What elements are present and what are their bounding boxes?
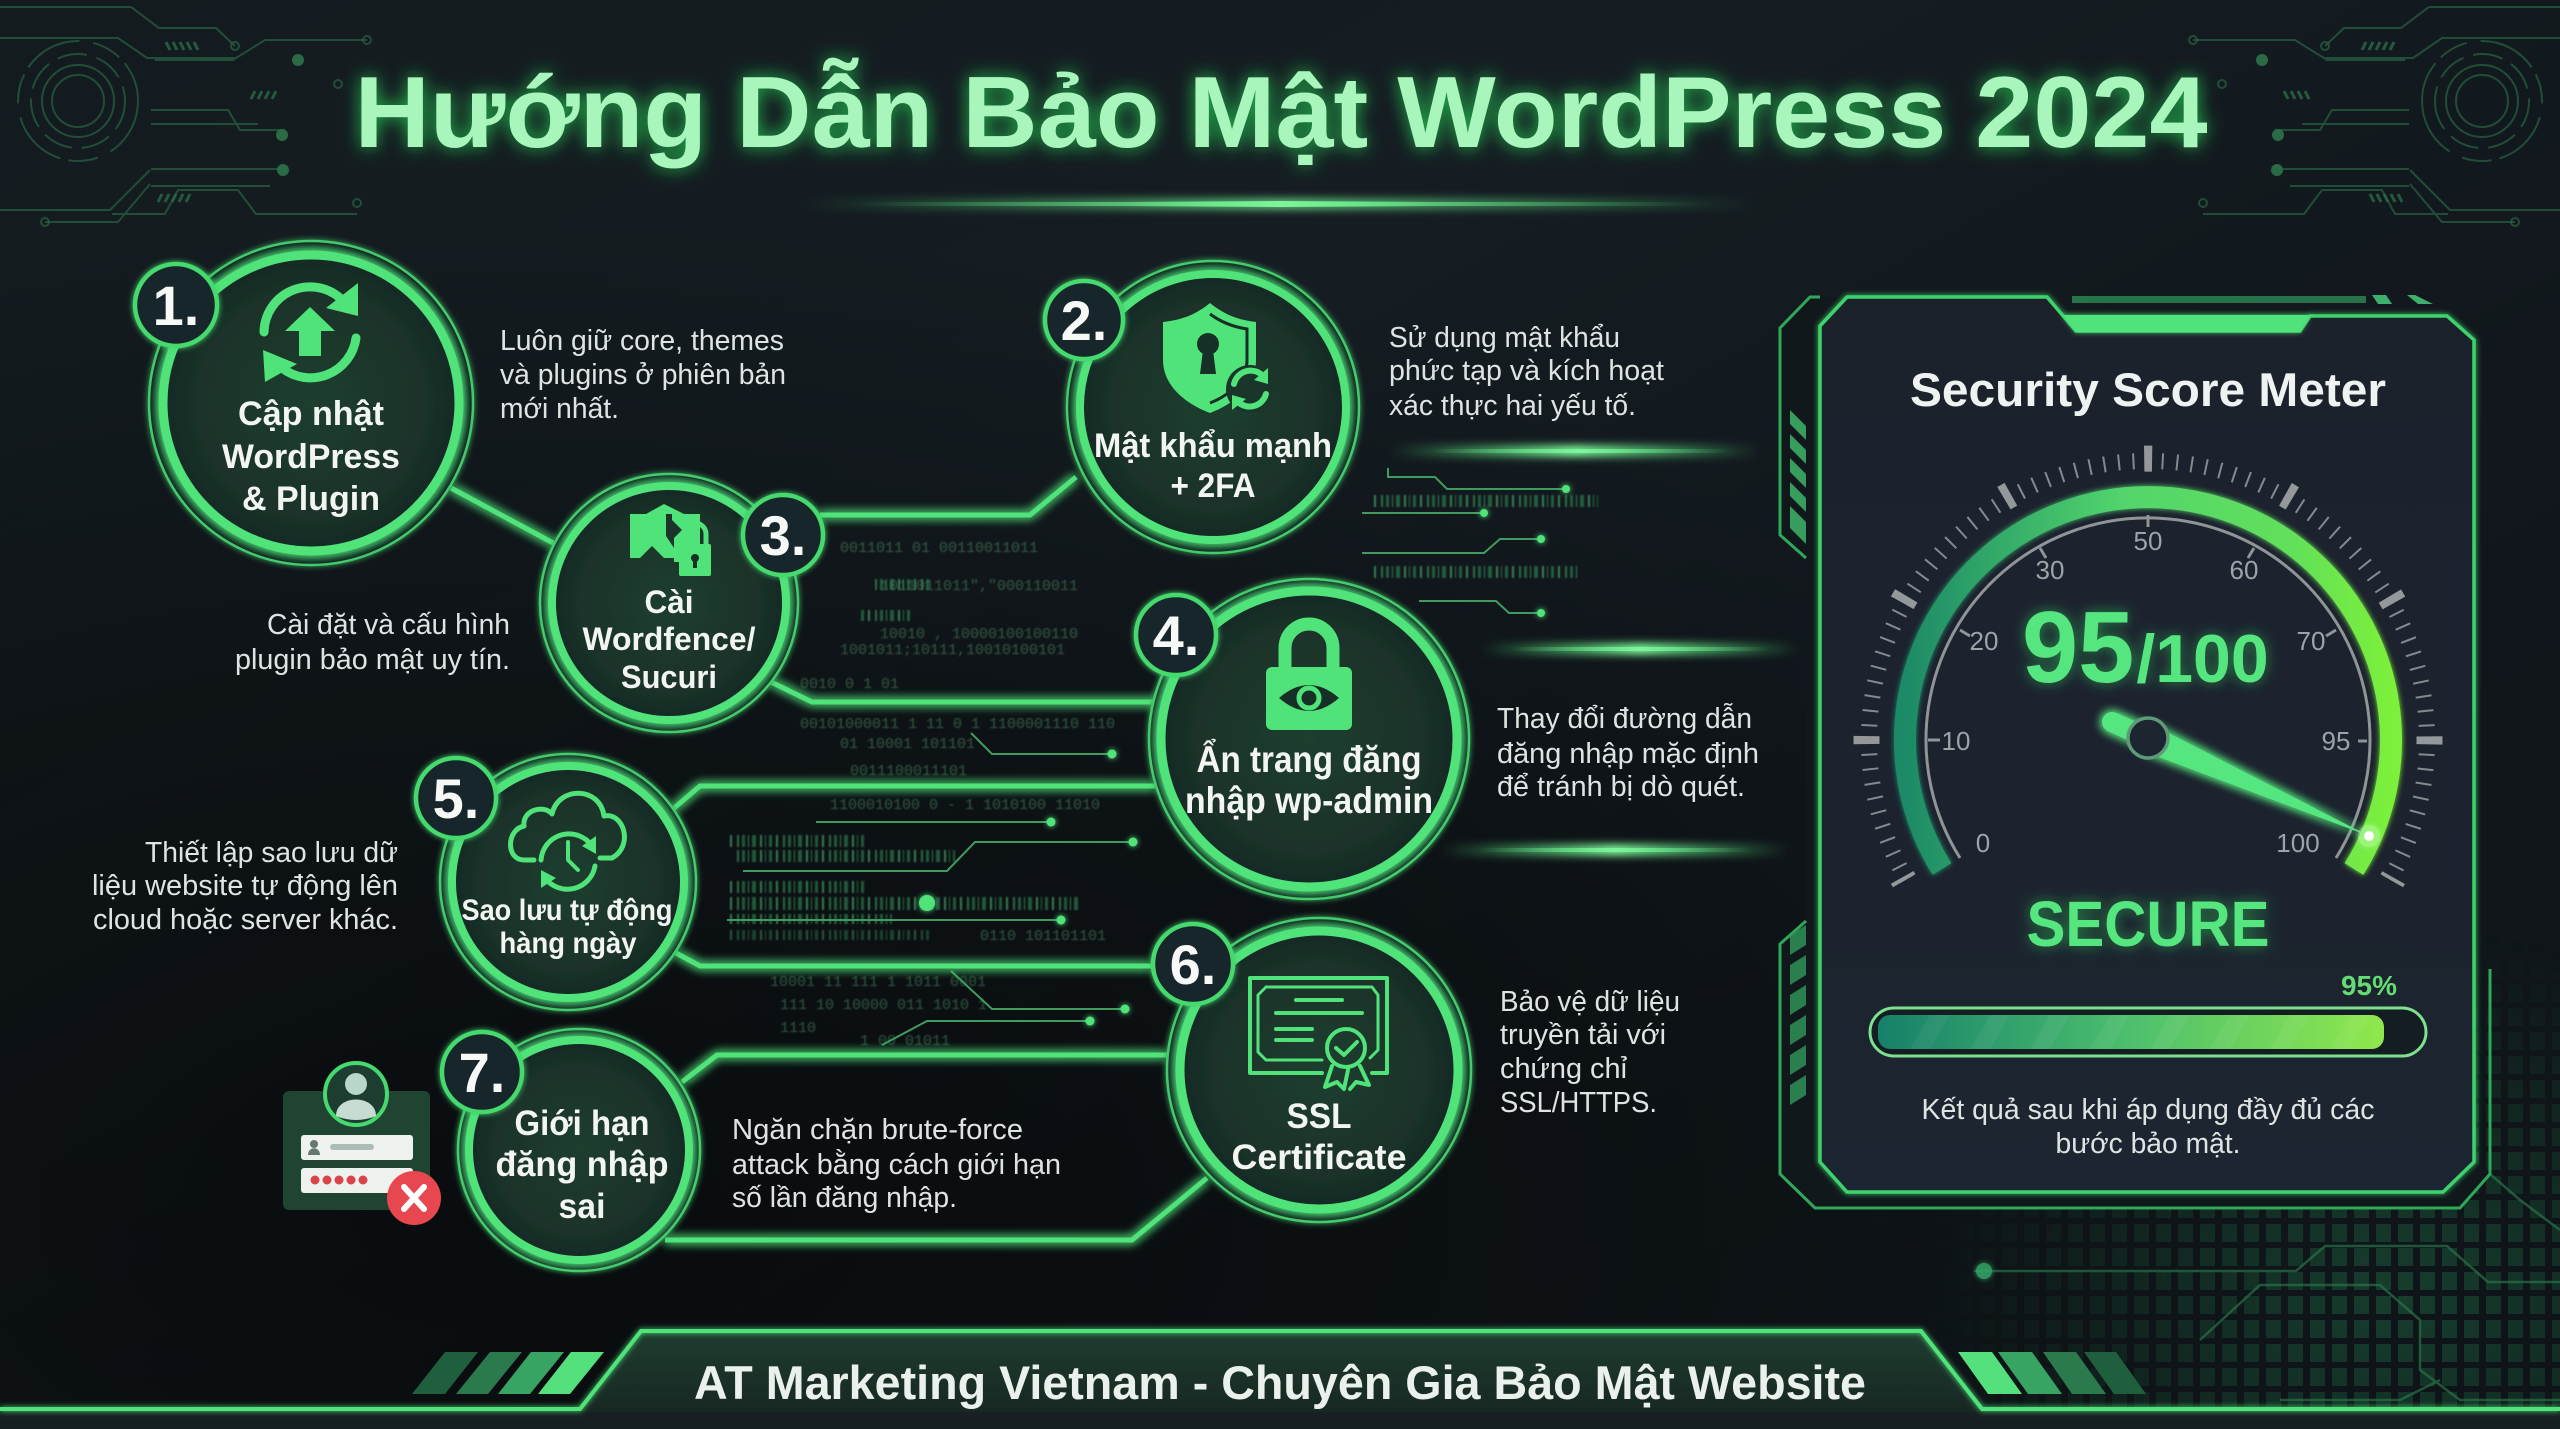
step 3 description: plugin bảo mật uy tín. (235, 644, 510, 676)
status text: SECURE (2026, 888, 2270, 960)
step 5 badge (416, 758, 496, 838)
step 3 description (235, 609, 510, 676)
icon: certificate (1250, 978, 1387, 1089)
step 1 label (222, 395, 400, 518)
step 7 label: sai (558, 1187, 606, 1226)
data code streams: 01 10001 101101 (840, 736, 975, 753)
step 6 description: truyền tải với (1500, 1019, 1666, 1051)
progress bar (1870, 1008, 2426, 1056)
step 7 badge: 7. (459, 1041, 505, 1104)
panel caption (1922, 1094, 2374, 1160)
step 1 badge: 1. (153, 274, 199, 337)
step 4 badge: 4. (1153, 604, 1199, 667)
step 6 label: Certificate (1232, 1138, 1406, 1177)
footer text: AT Marketing Vietnam - Chuyên Gia Bảo Mật Website (694, 1356, 1866, 1409)
step 1 description (500, 325, 786, 425)
icon: sync arrow up (263, 283, 358, 382)
gauge numeric labels: 0 (1976, 828, 1990, 858)
step 2 badge (1045, 281, 1123, 359)
icon: lock with eye (1266, 624, 1352, 730)
step 2 label: + 2FA (1170, 467, 1256, 505)
panel caption: Kết quả sau khi áp dụng đầy đủ các (1922, 1094, 2374, 1126)
step 2 badge: 2. (1061, 289, 1107, 352)
step 2 label: Mật khẩu mạnh (1094, 427, 1332, 465)
step 3 label: Sucuri (621, 659, 717, 695)
step 6 label: SSL (1286, 1097, 1352, 1136)
step 7 ring (458, 1029, 700, 1271)
step 3 badge (743, 495, 823, 575)
gauge numeric labels: 60 (2230, 555, 2258, 585)
footer banner (0, 1330, 2560, 1429)
step 2 description (1389, 322, 1664, 422)
data code streams: 10001 11 111 1 1011 0001 (770, 974, 986, 991)
step 5 description: liệu website tự động lên (92, 870, 398, 902)
step 4 ring (1149, 579, 1469, 899)
percent label: 95% (2341, 970, 2397, 1001)
step 5 label: Sao lưu tự động (462, 894, 672, 927)
step 7 description: Ngăn chặn brute-force (732, 1114, 1023, 1146)
step 7 description: số lần đăng nhập. (732, 1182, 957, 1214)
gauge numeric labels: 30 (2036, 555, 2064, 585)
step 1 description: Luôn giữ core, themes (500, 325, 784, 357)
step 2: password (1045, 261, 1359, 553)
step 6: ssl (1153, 918, 1471, 1222)
step 2 description: Sử dụng mật khẩu (1389, 322, 1620, 354)
step 5 description: cloud hoặc server khác. (93, 904, 398, 936)
data code streams: 0011100011101 (850, 763, 967, 780)
gauge inner scale (1926, 515, 2370, 858)
step 5 label (462, 894, 672, 960)
data code streams: 1001011;10111,10010100101 (840, 642, 1065, 659)
icon: firewall lock (630, 504, 711, 576)
data code streams: 1 00 01011 (860, 1033, 950, 1050)
gauge numeric labels: 95 (2322, 726, 2350, 756)
gauge numeric labels: 10 (1942, 726, 1970, 756)
step 6 ring (1167, 918, 1471, 1222)
step 1 label: WordPress (222, 438, 400, 476)
step 4 label: Ẩn trang đăng (1196, 738, 1422, 780)
step 4 description: đăng nhập mặc định (1497, 738, 1759, 770)
data code streams: 1100010100 0 - 1 1010100 11010 (830, 797, 1100, 814)
panel caption: bước bảo mật. (2056, 1128, 2240, 1160)
gauge numeric labels: 100 (2276, 828, 2320, 858)
step 6 badge: 6. (1170, 933, 1216, 996)
step 4 description: để tránh bị dò quét. (1497, 771, 1745, 803)
data code streams (727, 468, 1598, 1050)
panel: security score meter (1780, 295, 2490, 1208)
decorative circuit: top left (0, 7, 371, 226)
step 4 label: nhập wp-admin (1185, 780, 1433, 821)
step 1 description: và plugins ở phiên bản (500, 359, 786, 391)
step 3 label: Cài (644, 584, 694, 620)
icon: failed login card (283, 1063, 441, 1225)
step 1: update (135, 241, 473, 565)
step 4: hide login (1136, 579, 1469, 899)
score value: 95 (2022, 592, 2134, 704)
step 1 label: Cập nhật (238, 395, 384, 433)
step 7 label: Giới hạn (514, 1104, 650, 1143)
step 3 badge: 3. (760, 504, 806, 567)
step 2 description: phức tạp và kích hoạt (1389, 355, 1664, 387)
data code streams: 0010 0 1 01 (800, 676, 899, 693)
step 6 description: chứng chỉ (1500, 1053, 1628, 1085)
step 6 description: Bảo vệ dữ liệu (1500, 986, 1680, 1018)
title: Hướng Dẫn Bảo Mật WordPress 2024 (354, 57, 2208, 169)
decorative flares (1390, 445, 1800, 856)
icon: shield (1163, 303, 1274, 413)
step 1 badge (135, 264, 217, 346)
step 5 badge: 5. (433, 767, 479, 830)
step 4 badge (1136, 595, 1216, 675)
gauge coloured arc (1905, 497, 2391, 869)
step 3: wordfence (540, 474, 823, 732)
step 5: backup (416, 754, 696, 1010)
step 7: login limit (442, 1029, 700, 1271)
step 6 description: SSL/HTTPS. (1500, 1087, 1657, 1119)
gauge numeric labels: 20 (1970, 626, 1998, 656)
connector lines between steps (451, 477, 1207, 1240)
panel outer frame (1780, 295, 2490, 1208)
footer stripes right (1958, 1352, 2146, 1394)
title underline flare (800, 198, 1760, 210)
data code streams: 10010 , 10000100100110 (880, 626, 1078, 643)
step 1 description: mới nhất. (500, 393, 619, 425)
data code streams: 111 10 10000 011 1010 1 (780, 997, 987, 1014)
step 5 label: hàng ngày (500, 927, 637, 960)
step 4 label (1185, 738, 1433, 821)
footer stripes left (412, 1352, 604, 1394)
step 7 description: attack bằng cách giới hạn (732, 1148, 1061, 1181)
step 3 ring (540, 474, 798, 732)
step 7 description (732, 1114, 1061, 1214)
gauge numeric labels (1942, 526, 2350, 858)
data code streams: 00101000011 1 11 0 1 1100001110 110 (800, 716, 1115, 733)
gauge outer ticks (1866, 459, 2430, 881)
step 5 ring (440, 754, 696, 1010)
gauge (1866, 459, 2430, 881)
step 5 description: Thiết lập sao lưu dữ (145, 837, 398, 869)
step 6 description (1500, 986, 1680, 1119)
panel top accent (2063, 315, 2310, 332)
step 2 label (1094, 427, 1332, 505)
step 5 description (92, 837, 398, 936)
step 2 ring (1067, 261, 1359, 553)
panel body (1820, 297, 2474, 1192)
step 2 description: xác thực hai yếu tố. (1389, 390, 1636, 422)
step 4 description: Thay đổi đường dẫn (1497, 702, 1752, 735)
step 3 description: Cài đặt và cấu hình (267, 609, 510, 641)
step 4 description (1497, 702, 1759, 803)
step 7 label (496, 1104, 668, 1226)
step 1 ring (149, 241, 473, 565)
step 7 badge (442, 1032, 522, 1112)
step 6 badge (1153, 924, 1233, 1004)
step 7 label: đăng nhập (496, 1145, 668, 1184)
decorative grid and traces: bottom right (1972, 1014, 2560, 1407)
data code streams: 1110 (780, 1020, 816, 1037)
gauge numeric labels: 70 (2297, 626, 2325, 656)
step 3 label: Wordfence/ (582, 621, 756, 657)
data code streams: 1011011011","000110011 (880, 578, 1078, 595)
step 3 label (582, 584, 756, 695)
decorative circuit: top right (2189, 7, 2560, 226)
data code streams: 0011011 01 00110011011 (840, 540, 1038, 557)
data code streams: 0110 101101101 (980, 928, 1106, 945)
gauge needle (2112, 718, 2380, 847)
score value: /100 (2136, 621, 2269, 697)
step 6 label (1232, 1097, 1406, 1177)
gauge numeric labels: 50 (2134, 526, 2162, 556)
panel heading: Security Score Meter (1910, 363, 2386, 416)
icon: cloud clock (510, 793, 624, 889)
step 1 label: & Plugin (242, 480, 380, 518)
